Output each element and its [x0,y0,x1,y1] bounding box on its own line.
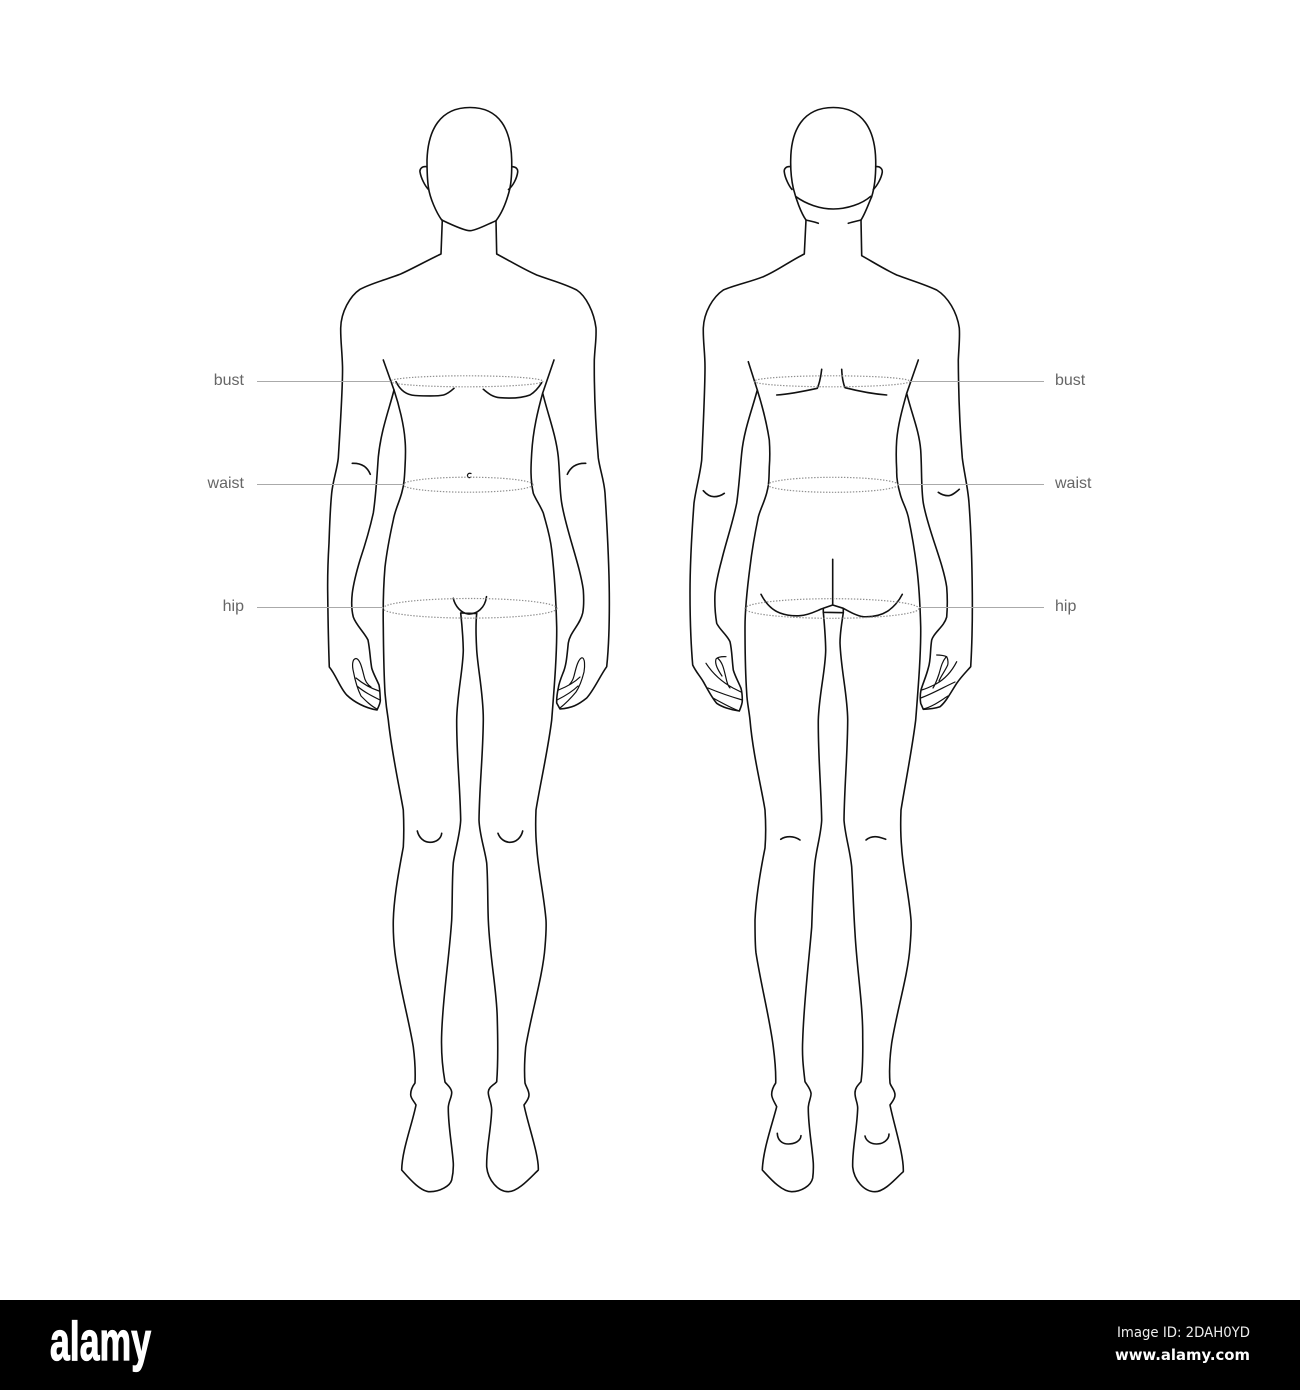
logo: alamy [50,1310,151,1372]
front left hand fingers [353,658,380,709]
front crotch [453,597,486,614]
back right arm and shoulder [861,220,972,709]
right labels: bust [1055,372,1086,389]
website: www.alamy.com [1115,1346,1250,1364]
back left shoulder and arm [690,220,806,711]
back bust ring [754,376,910,387]
right labels [1054,372,1092,615]
front view figure [328,108,609,1192]
front right torso and leg [476,360,557,1192]
front elbow marks [352,463,586,474]
back view figure [690,108,972,1192]
front head [427,108,512,231]
back shoulder blade lines [777,369,887,395]
front hip ring [383,598,557,618]
back elbow marks [703,489,959,497]
right labels: hip [1055,598,1076,615]
front bust ring [390,376,543,387]
right leader lines [898,382,1044,608]
image id: Image ID: 2DAH0YD [1117,1325,1250,1341]
back right leg and torso [840,360,921,1192]
measurement rings [383,376,919,618]
back jaw and neck marks [793,188,872,223]
front chest lines [396,382,542,398]
back knee marks [781,837,886,840]
back hip ring [745,599,919,618]
back ears [784,167,882,190]
left labels: hip [223,598,244,615]
back heel marks [777,1133,889,1144]
front knee marks [417,831,523,842]
back waist ring [768,477,898,492]
back right hand fingers [921,655,957,709]
front navel [467,473,471,478]
back head [791,108,876,197]
left labels: waist [207,475,245,492]
left leader lines [257,382,403,608]
front right arm and shoulder [496,221,609,709]
front ears [420,167,518,190]
front left torso and leg [383,360,463,1192]
back spine and seat lines [761,559,902,617]
back left torso and leg [745,362,826,1192]
left labels: bust [214,372,245,389]
front waist ring [403,477,533,492]
right labels: waist [1054,475,1092,492]
front left shoulder and arm [328,220,442,710]
front right hand fingers [557,658,585,708]
back left hand fingers [706,657,742,711]
left labels [207,372,245,615]
back hairline [796,196,871,209]
footer bar [0,1300,1300,1390]
